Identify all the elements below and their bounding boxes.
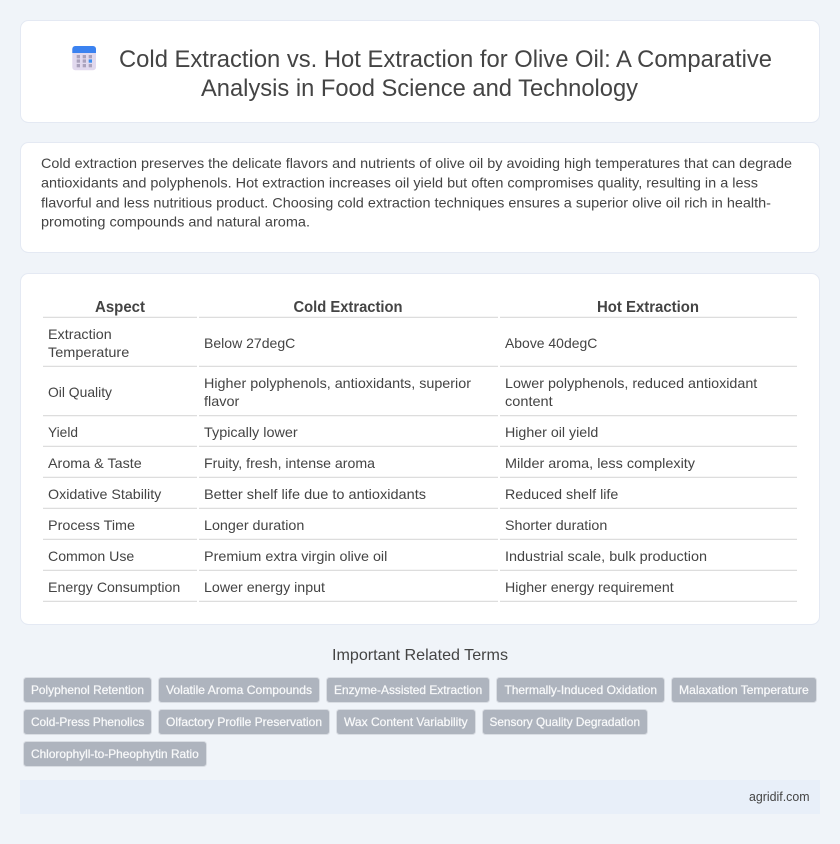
row: common use: Industrial scale, bulk production [505, 548, 707, 564]
table header row: Hot Extraction [597, 299, 699, 316]
tag [24, 678, 152, 702]
tag [158, 710, 330, 734]
row: process time: Longer duration [204, 517, 304, 533]
tag: Malaxation Temperature [679, 683, 809, 697]
row: common use [43, 548, 797, 570]
tag: Enzyme-Assisted Extraction [334, 683, 482, 697]
text block: introduction: Cold extraction preserves the delicate flavors and nutrients of olive oil by avoiding high temperatures that can degrade [41, 155, 792, 171]
tag: Sensory Quality Degradation [490, 715, 640, 729]
tag [672, 678, 816, 702]
tag [24, 710, 152, 734]
row: aroma and taste [43, 455, 797, 477]
row: energy consumption [43, 579, 797, 601]
tag [482, 710, 648, 734]
row: extraction temperature: Above 40degC [505, 335, 597, 351]
row: extraction temperature: Temperature [48, 344, 130, 360]
tag [158, 678, 320, 702]
row: common use: Common Use [48, 548, 135, 564]
row: oil quality: flavor [204, 393, 240, 409]
text block: introduction [41, 155, 792, 230]
title: Cold Extraction vs. Hot Extraction for Olive Oil: A Comparative [119, 46, 772, 73]
row: oxidative stability: Reduced shelf life [505, 486, 619, 502]
row: extraction temperature: Below 27degC [204, 335, 295, 351]
row: oil quality: Lower polyphenols, reduced antioxidant [505, 375, 757, 391]
row: oxidative stability: Oxidative Stability [48, 486, 161, 502]
panel: comparison table [20, 274, 820, 624]
tag: Volatile Aroma Compounds [166, 683, 312, 697]
tags: related terms [24, 678, 816, 766]
tag: Chlorophyll-to-Pheophytin Ratio [31, 747, 199, 761]
row: oil quality [43, 375, 797, 416]
tag: Polyphenol Retention [31, 683, 144, 697]
text block: introduction: flavorful and less nutritious product. Choosing cold extraction techniques ensures a superior olive oil rich in health- [41, 194, 771, 210]
tag: Wax Content Variability [344, 715, 468, 729]
heading: important related terms: Important Related Terms [332, 647, 508, 664]
row: aroma and taste: Aroma & Taste [48, 455, 142, 471]
row: oil quality: content [505, 393, 553, 409]
row: oil quality: Higher polyphenols, antioxidants, superior [204, 375, 471, 391]
panel: header [20, 20, 820, 122]
row: aroma and taste: Milder aroma, less complexity [505, 455, 695, 471]
icon: calendar [72, 46, 96, 70]
row: oxidative stability: Better shelf life due to antioxidants [204, 486, 426, 502]
table header row: Cold Extraction [294, 299, 402, 316]
row: energy consumption: Higher energy requirement [505, 579, 674, 595]
text block: introduction: antioxidants and polyphenols. Hot extraction increases oil yield but often compromises quality, resulting in a less [41, 174, 758, 190]
row: yield: Typically lower [204, 424, 298, 440]
title: Analysis in Food Science and Technology [201, 75, 638, 102]
tag [496, 678, 664, 702]
row: energy consumption: Lower energy input [204, 579, 325, 595]
row: yield: Higher oil yield [505, 424, 598, 440]
table header row: Aspect [95, 299, 146, 316]
title [119, 46, 772, 102]
tag [326, 678, 490, 702]
row: energy consumption: Energy Consumption [48, 579, 180, 595]
footer: agridif.com [749, 789, 810, 804]
row: extraction temperature: Extraction [48, 326, 112, 342]
footer [20, 780, 820, 814]
tag [24, 742, 206, 766]
row: process time: Process Time [48, 517, 135, 533]
row: oxidative stability [43, 486, 797, 508]
tag: Thermally-Induced Oxidation [504, 683, 657, 697]
row: aroma and taste: Fruity, fresh, intense aroma [204, 455, 375, 471]
row: extraction temperature [43, 326, 797, 366]
row: yield [43, 424, 797, 446]
row: oil quality: Oil Quality [48, 384, 112, 400]
tag: Olfactory Profile Preservation [166, 715, 322, 729]
row: process time: Shorter duration [505, 517, 607, 533]
table header row [43, 299, 797, 317]
tag [336, 710, 476, 734]
panel: introduction [20, 142, 820, 252]
tag: Cold-Press Phenolics [31, 715, 144, 729]
row: process time [43, 517, 797, 539]
text block: introduction: promoting compounds and natural aroma. [41, 214, 310, 230]
row: yield: Yield [48, 424, 78, 440]
row: common use: Premium extra virgin olive oil [204, 548, 387, 564]
